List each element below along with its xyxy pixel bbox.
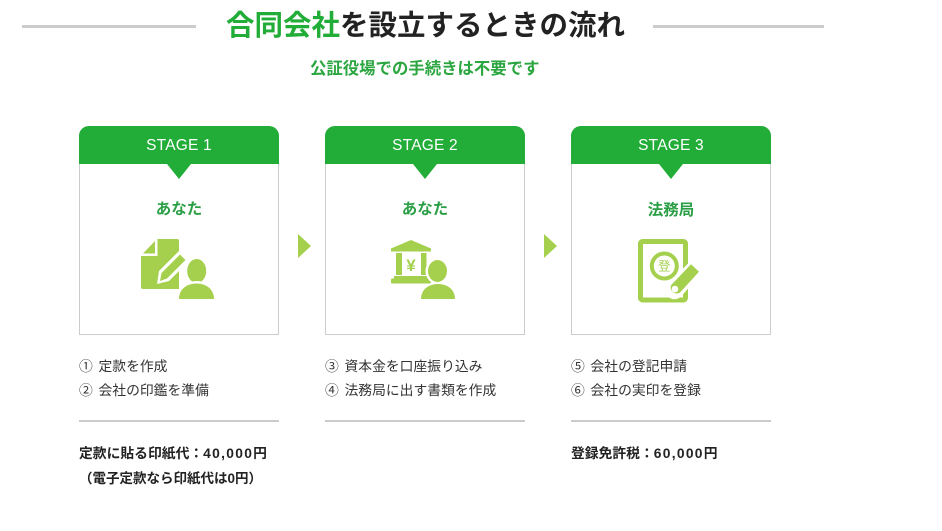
stage 2 header: STAGE 2	[392, 137, 458, 154]
steps: stage 2: 法務局に出す書類を作成	[344, 383, 496, 398]
title: 合同会社を設立するときの流れ	[226, 10, 625, 42]
steps: stage 3: ⑥	[571, 383, 585, 398]
divider: title right	[653, 25, 824, 28]
actor label: あなた	[156, 201, 202, 218]
actor label: あなた	[402, 201, 448, 218]
icon: bank and person	[391, 240, 455, 299]
stage 1 header: STAGE 1	[146, 137, 212, 154]
stage 1 header	[79, 126, 279, 164]
steps: stage 1: ②	[79, 383, 93, 398]
stage 3 header	[571, 126, 771, 164]
stage 2 header	[325, 126, 525, 164]
steps: stage 1: 定款を作成	[98, 358, 167, 374]
steps: stage 3: ⑤	[571, 358, 585, 374]
icon: registration form and pen: 登	[658, 256, 671, 274]
actor label: 法務局	[648, 202, 694, 219]
steps: stage 3: 会社の登記申請	[590, 358, 687, 374]
steps: stage 2: ③	[325, 358, 339, 374]
steps: stage 1: 会社の印鑑を準備	[98, 383, 209, 398]
arrow: stage 2 to 3	[544, 234, 557, 258]
header pointer	[413, 164, 437, 179]
steps: stage 2	[325, 358, 496, 398]
steps: stage 1	[79, 358, 209, 398]
cost: stage 3: 登録免許税：60,000円	[571, 446, 718, 461]
panel: stage 3	[571, 126, 771, 335]
divider: stage 2	[325, 420, 525, 422]
divider: title left	[22, 25, 196, 28]
cost: stage 1: （電子定款なら印紙代は0円）	[79, 471, 262, 486]
arrow: stage 1 to 2	[298, 234, 311, 258]
steps: stage 2: 資本金を口座振り込み	[344, 358, 482, 374]
header pointer	[659, 164, 683, 179]
panel: stage 2	[325, 126, 525, 335]
header pointer	[167, 164, 191, 179]
steps: stage 1: ①	[79, 358, 93, 374]
steps: stage 3: 会社の実印を登録	[590, 383, 701, 398]
steps: stage 2: ④	[325, 383, 339, 398]
panel frame	[79, 126, 279, 335]
icon: bank and person: ¥	[406, 256, 416, 275]
cost: stage 1	[79, 446, 267, 486]
icon: document, pencil and person	[141, 239, 214, 299]
cost: stage 1: 定款に貼る印紙代：40,000円	[79, 446, 267, 461]
panel frame	[325, 126, 525, 335]
subtitle: 公証役場での手続きは不要です	[310, 60, 539, 78]
divider: stage 1	[79, 420, 279, 422]
stage 3 header: STAGE 3	[638, 137, 704, 154]
divider: stage 3	[571, 420, 771, 422]
panel frame	[571, 126, 771, 335]
steps: stage 3	[571, 358, 701, 398]
icon: registration form and pen	[638, 239, 699, 302]
panel: stage 1	[79, 126, 279, 335]
